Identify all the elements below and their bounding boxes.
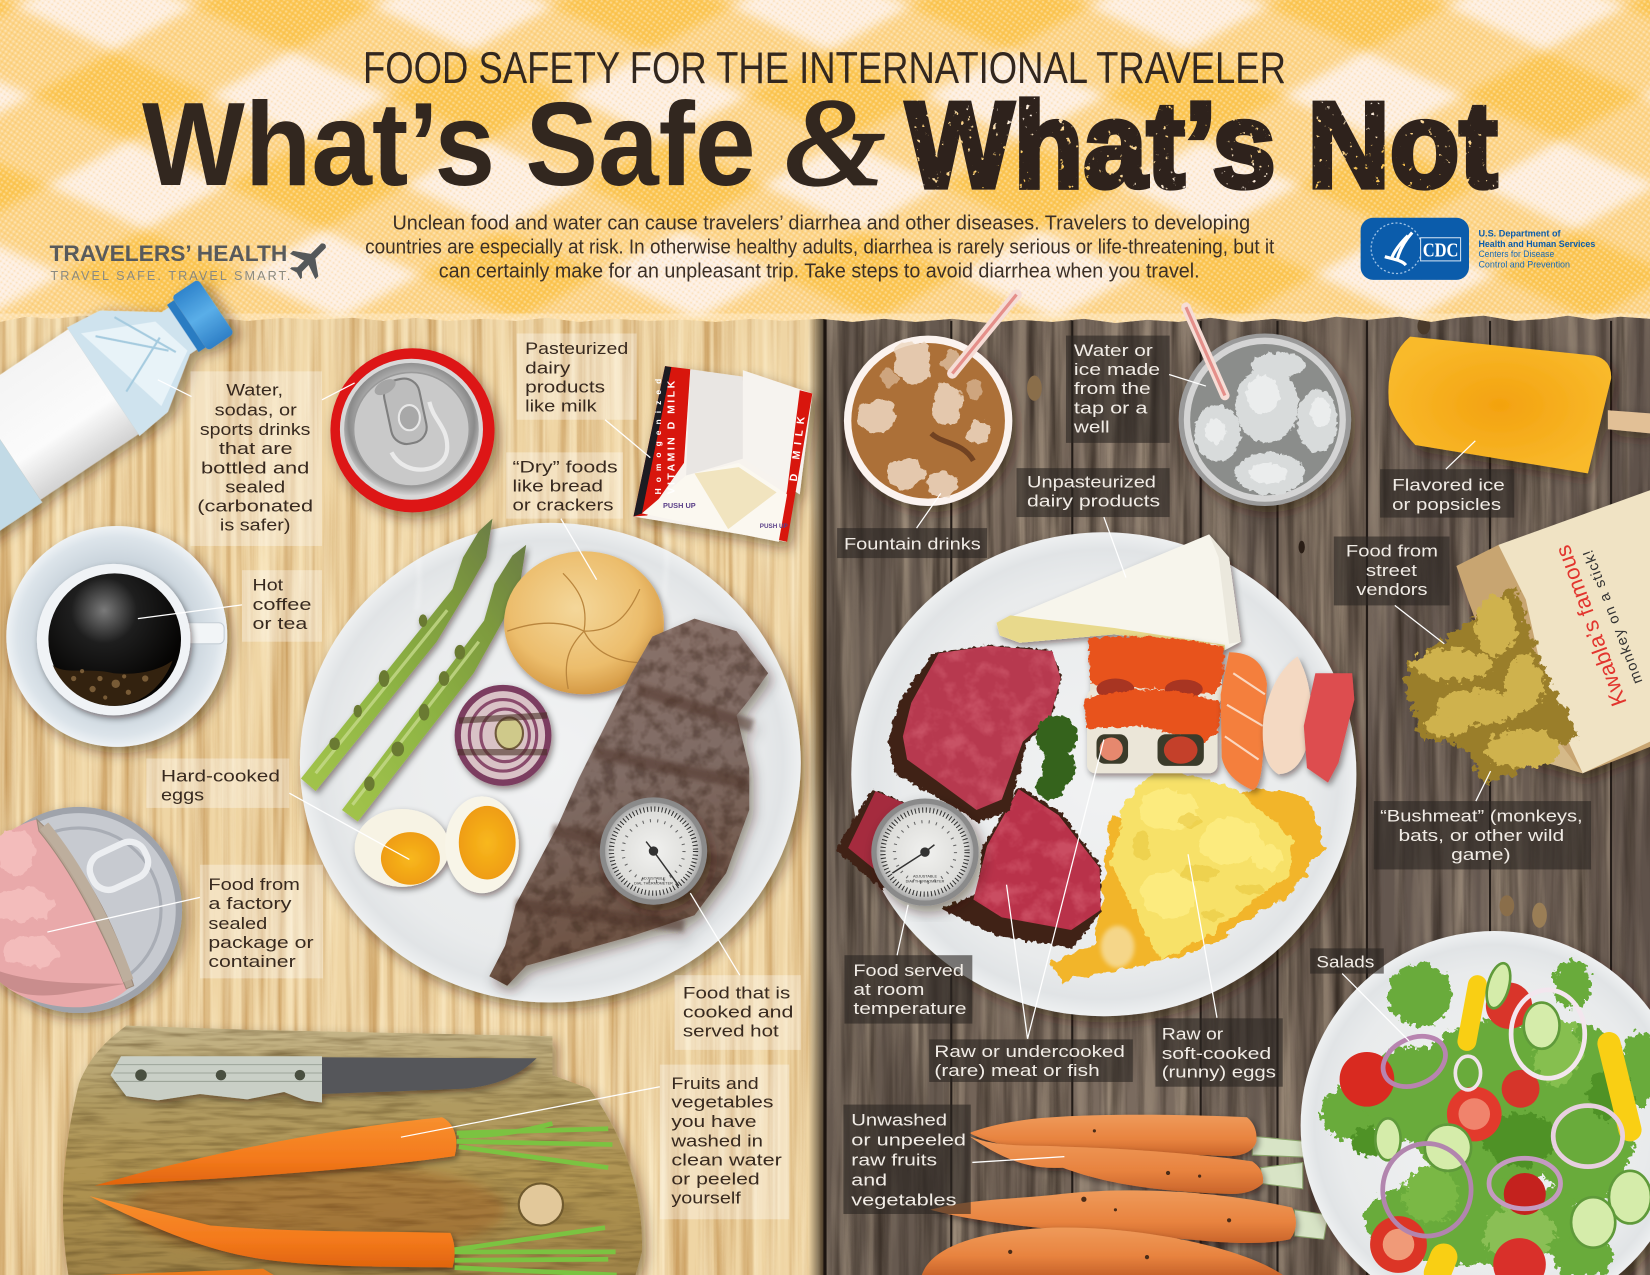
panel: safe plate: [300, 519, 801, 1003]
callout: unwashed fruits and vegetables: Unwashed: [851, 1111, 947, 1130]
travelers' health logo: TRAVELERS’ HEALTH: [49, 241, 287, 266]
callout: unpasteurized dairy: Unpasteurized: [1027, 473, 1156, 492]
travelers' health logo: [49, 232, 338, 287]
callout: dry foods: or crackers: [512, 496, 613, 515]
icon: tuna can: [0, 807, 182, 1013]
intro paragraph: [365, 211, 1275, 283]
icon: street vendor bag: monkey on a stick!: [1581, 548, 1646, 686]
callout: flavored ice: or popsicles: [1392, 495, 1501, 514]
callout: bushmeat: [1374, 771, 1591, 869]
callout: hot coffee: [138, 570, 322, 642]
callout: dry foods: “Dry” foods: [512, 457, 618, 476]
callout: hard-cooked eggs: [146, 758, 409, 859]
callout: water sodas: (carbonated: [197, 496, 313, 515]
callout: cooked and served hot: Food that is: [683, 983, 790, 1002]
main title: ampersand: &: [783, 73, 884, 211]
icon: rare meat slices: [836, 645, 1101, 948]
callout: raw meat or fish: Raw or undercooked: [934, 1042, 1125, 1061]
callout: flavored ice: Flavored ice: [1392, 476, 1505, 495]
callout: street vendors: vendors: [1356, 580, 1427, 599]
callout: unwashed fruits and vegetables: raw fruits: [851, 1151, 937, 1170]
callout: bushmeat: “Bushmeat” (monkeys,: [1380, 807, 1583, 826]
icon: cucumbers: [1375, 961, 1650, 1248]
callout: bushmeat: game): [1451, 845, 1511, 864]
callout: water sodas: that are: [219, 439, 293, 458]
icon: thermometer right: DIAL THERMOMETER: [906, 880, 945, 884]
callout: water sodas: sports drinks: [200, 420, 310, 439]
panel: unsafe plate: [836, 532, 1356, 1016]
main title: what's not: What’s Not: [906, 77, 1497, 213]
icon: milk carton: [633, 366, 812, 542]
callout: washed fruits and vegetables: Fruits and: [671, 1074, 759, 1093]
travelers' health logo: TRAVEL SAFE. TRAVEL SMART.: [51, 269, 290, 283]
callout: raw eggs: soft-cooked: [1162, 1044, 1271, 1063]
callout: cooked and served hot: served hot: [683, 1022, 779, 1041]
callout: unwashed fruits and vegetables: vegetables: [851, 1191, 957, 1210]
callout: room temperature food: temperature: [853, 999, 967, 1018]
icon: brie cheese: [997, 534, 1241, 650]
icon: tomatoes: [1340, 983, 1546, 1275]
icon: fountain drink straw: [952, 295, 1017, 373]
callout: raw eggs: Raw or: [1162, 1024, 1224, 1043]
callout: washed fruits and vegetables: vegetables: [671, 1093, 773, 1112]
icon: milk carton: PUSH UP: [663, 501, 696, 510]
callout: factory sealed food: sealed: [208, 914, 267, 933]
intro paragraph: countries are especially at risk. In otherwise healthy adults, diarrhea is rarely serious or life-threatening, but it: [365, 236, 1275, 259]
callout: dry foods: [506, 452, 623, 580]
cdc logo: Centers for Disease: [1478, 249, 1554, 259]
callout: raw meat or fish: (rare) meat or fish: [934, 1061, 1100, 1080]
callout: unwashed fruits and vegetables: [843, 1105, 1064, 1214]
callout: pasteurized dairy: Pasteurized: [525, 339, 628, 358]
icon: thermometer right: ADJUSTABLE: [913, 874, 937, 878]
icon: thermometer: ADJUSTABLE: [641, 876, 666, 880]
cdc logo: CDC: [1423, 240, 1458, 262]
cdc logo: U.S. Department of: [1478, 229, 1562, 239]
icon: yellow peppers: [1437, 985, 1630, 1273]
callout: room temperature food: Food served: [853, 961, 964, 980]
main title: what's safe: What’s Safe: [142, 78, 756, 211]
intro paragraph: can certainly make for an unpleasant trip. Take steps to avoid diarrhea when you travel.: [439, 260, 1200, 283]
callout: raw eggs: (runny) eggs: [1162, 1063, 1276, 1082]
icon: salmon nigiri: [1221, 652, 1267, 790]
callout: unwashed fruits and vegetables: and: [851, 1171, 887, 1190]
cdc logo: [1361, 218, 1595, 280]
icon: glass of ice water: [1179, 333, 1351, 506]
header gingham cloth: [0, 0, 1650, 347]
callout: washed fruits and vegetables: [401, 1065, 789, 1219]
callout: room temperature food: [844, 905, 972, 1024]
callout: bushmeat: bats, or other wild: [1399, 826, 1564, 845]
callout: factory sealed food: container: [208, 952, 296, 971]
callout: room temperature food: at room: [853, 980, 924, 999]
icon: tuna nigiri: [1304, 673, 1354, 783]
icon: milk carton: VITAMIN D MILK: [666, 380, 678, 494]
icon: cutting board: [63, 1026, 642, 1275]
callout: unpasteurized dairy: dairy products: [1027, 492, 1160, 511]
callout: tap water or ice: ice made: [1074, 360, 1160, 379]
callout: washed fruits and vegetables: yourself: [671, 1188, 741, 1207]
callout: hot coffee: or tea: [253, 614, 308, 633]
callout: raw meat or fish: [929, 740, 1133, 1082]
callout: factory sealed food: a factory: [208, 894, 292, 913]
icon: lettuce: [1322, 960, 1650, 1275]
icon: unwashed carrots: [922, 1115, 1328, 1275]
icon: thermometer: DIAL THERMOMETER: [634, 882, 673, 886]
callout: street vendors: street: [1366, 561, 1417, 580]
icon: glass straw: [1186, 307, 1225, 396]
callout: hard-cooked eggs: eggs: [161, 786, 204, 805]
icon: fountain drink cup: [844, 336, 1012, 506]
callout: pasteurized dairy: [517, 333, 650, 458]
callout: factory sealed food: Food from: [208, 875, 300, 894]
icon: monkey satay skewers: [1405, 584, 1578, 784]
callout: water sodas: sodas, or: [215, 401, 297, 420]
icon: asparagus: [301, 519, 526, 822]
callout: water sodas: is safer): [220, 516, 290, 535]
icon: milk carton: PUSH UP: [760, 523, 788, 530]
icon: scrambled eggs: [1111, 766, 1295, 959]
callout: water sodas: [158, 371, 355, 546]
callout: cooked and served hot: cooked and: [683, 1002, 793, 1021]
panel: salad plate: [1301, 931, 1650, 1275]
right dark plank background: [825, 305, 1650, 1275]
callout: washed fruits and vegetables: or peeled: [671, 1170, 760, 1189]
callout: tap water or ice: well: [1073, 417, 1110, 436]
icon: water bottle: [0, 251, 253, 564]
callout: tap water or ice: [1066, 336, 1206, 443]
callout: fountain drinks: Fountain drinks: [844, 535, 981, 554]
icon: washed carrots: [89, 1117, 617, 1275]
icon: grilled steak: [489, 619, 768, 986]
callout: washed fruits and vegetables: clean water: [671, 1151, 782, 1170]
callout: washed fruits and vegetables: washed in: [670, 1132, 763, 1151]
intro paragraph: Unclean food and water can cause travelers’ diarrhea and other diseases. Travelers to developing: [393, 211, 1250, 234]
steam wisps: [417, 515, 668, 631]
callout: hard-cooked eggs: Hard-cooked: [161, 767, 280, 786]
callout: factory sealed food: package or: [208, 933, 314, 952]
icon: orange sauce: [1051, 789, 1325, 983]
callout: dry foods: like bread: [512, 476, 603, 495]
cdc logo: Control and Prevention: [1478, 260, 1570, 270]
icon: popsicle: [1388, 337, 1650, 473]
icon: parsley: [1035, 715, 1078, 800]
callout: unpasteurized dairy: [1017, 468, 1170, 578]
icon: red onion rings: [1375, 990, 1623, 1236]
callout: tap water or ice: Water or: [1074, 341, 1153, 360]
callout: flavored ice: [1380, 441, 1514, 518]
callout: cooked and served hot: [675, 893, 801, 1050]
icon: white fish nigiri: [1263, 656, 1311, 774]
callout: pasteurized dairy: dairy: [525, 358, 571, 377]
left wood table background: [0, 305, 825, 1275]
callout: salads: [1310, 948, 1409, 1041]
icon: street vendor bag: Kwabla’s famous: [1550, 542, 1632, 710]
icon: soda can top: [330, 348, 495, 512]
callout: pasteurized dairy: products: [525, 377, 605, 396]
callout: salads: Salads: [1316, 952, 1374, 971]
callout: water sodas: bottled and: [201, 458, 309, 477]
icon: street vendor bag: [1456, 490, 1650, 773]
callout: tap water or ice: tap or a: [1074, 398, 1148, 417]
callout: hot coffee: Hot: [253, 576, 283, 595]
icon: milk carton: D MILK: [788, 416, 808, 482]
callout: pasteurized dairy: like milk: [525, 396, 597, 415]
callout: factory sealed food: [47, 865, 323, 978]
callout: unwashed fruits and vegetables: or unpeeled: [851, 1131, 966, 1150]
icon: thermometer: [600, 797, 707, 905]
icon: thermometer right: [871, 798, 979, 906]
callout: raw eggs: [1155, 854, 1283, 1087]
icon: grilled onion: [455, 685, 551, 786]
icon: hard-cooked eggs: [355, 796, 519, 893]
callout: fountain drinks: [837, 493, 987, 558]
icon: knife: [110, 1056, 537, 1102]
icon: milk carton: Homogenized: [653, 379, 663, 494]
callout: street vendors: [1334, 537, 1450, 644]
callout: water sodas: sealed: [225, 477, 285, 496]
header subtitle: FOOD SAFETY FOR THE INTERNATIONAL TRAVELER: [363, 44, 1286, 93]
callout: tap water or ice: from the: [1074, 379, 1151, 398]
callout: street vendors: Food from: [1346, 541, 1438, 560]
icon: coffee cup on saucer: [6, 526, 227, 747]
callout: hot coffee: coffee: [253, 595, 311, 614]
callout: water sodas: Water,: [226, 381, 283, 400]
cdc logo: Health and Human Services: [1478, 239, 1595, 249]
icon: bread roll: [504, 551, 664, 694]
callout: washed fruits and vegetables: you have: [671, 1112, 757, 1131]
icon: sushi rolls: [1084, 636, 1224, 773]
